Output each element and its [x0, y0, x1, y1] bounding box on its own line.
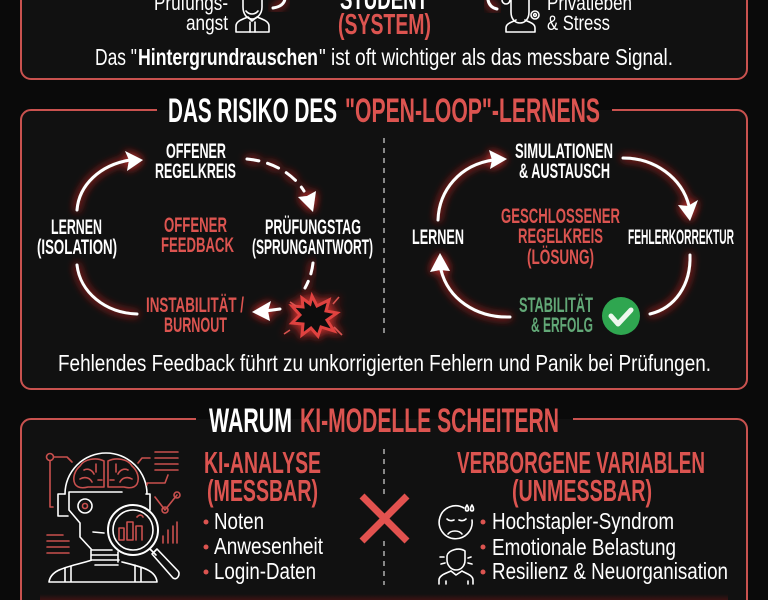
- arrow: stability back to learning: [430, 253, 510, 317]
- label: offener Feedback: OFFENER: [164, 214, 227, 237]
- label: geschlossener Regelkreis: GESCHLOSSENER: [501, 205, 620, 228]
- arrow: explosion to instability: [252, 301, 280, 321]
- label: Instabilität / Burnout: [146, 294, 244, 337]
- panel: why AI models fail: [21, 402, 747, 600]
- heading: KI-Analyse: (MESSBAR): [207, 473, 318, 508]
- arrow: learning to open loop: [77, 151, 143, 210]
- label: Prüfungstag: PRÜFUNGSTAG: [265, 216, 361, 239]
- list: hidden variables: Hochstapler-Syndrom: [492, 508, 674, 534]
- label: Prüfungstag: [252, 216, 373, 259]
- arrow: learning to simulations: [438, 150, 507, 220]
- label: Prüfungsangst: angst: [186, 12, 228, 35]
- label: Instabilität / Burnout: INSTABILITÄT /: [146, 294, 244, 317]
- heading: open-loop risk: DAS RISIKO DES: [168, 92, 337, 130]
- caption: background noise: [95, 44, 673, 70]
- caption: background noise: Hintergrundrauschen: [138, 44, 318, 70]
- icon: green check: [602, 297, 640, 335]
- arrow: dashed exam day to explosion: [305, 263, 313, 288]
- arrow: simulations to correction: [623, 158, 698, 221]
- label: offener Feedback: [161, 214, 234, 257]
- heading: why AI models fail: KI-MODELLE SCHEITERN: [300, 402, 559, 440]
- label: Lernen: LERNEN: [412, 226, 464, 249]
- label: Simulationen und Austausch: & AUSTAUSCH: [519, 160, 610, 183]
- label: Lernen (Isolation): (ISOLATION): [37, 236, 117, 259]
- arrow: private life swirl: [488, 0, 497, 9]
- list: hidden variables: Emotionale Belastung: [492, 534, 676, 560]
- label: geschlossener Regelkreis: (LÖSUNG): [527, 246, 594, 269]
- label: offener Regelkreis: REGELKREIS: [155, 160, 236, 183]
- label: Stabilität und Erfolg: STABILITÄT: [519, 294, 593, 317]
- arrow: exam anxiety swirl: [273, 0, 285, 8]
- label: offener Feedback: FEEDBACK: [161, 234, 234, 257]
- icon: robot head with magnifier: [46, 452, 180, 582]
- heading: hidden variables: (UNMESSBAR): [512, 473, 652, 508]
- label: Simulationen und Austausch: SIMULATIONEN: [515, 140, 613, 163]
- panel: open-loop risk: [21, 92, 747, 389]
- icon: explosion: [284, 296, 342, 336]
- heading: open-loop risk: "OPEN-LOOP"-LERNENS: [345, 92, 600, 130]
- heading: why AI models fail: [209, 402, 559, 440]
- label: Stabilität und Erfolg: [519, 294, 593, 337]
- icon: red cross: [362, 496, 407, 541]
- label: geschlossener Regelkreis: [501, 205, 620, 269]
- arrow: burnout back to learning: [77, 265, 137, 314]
- label: Stabilität und Erfolg: & ERFOLG: [531, 314, 593, 337]
- label: Simulationen und Austausch: [515, 140, 613, 183]
- heading: open-loop risk: [168, 92, 600, 130]
- label: Lernen (Isolation): LERNEN: [51, 216, 102, 239]
- label: geschlossener Regelkreis: REGELKREIS: [518, 225, 603, 248]
- label: Prüfungsangst: [154, 0, 228, 35]
- arrow: correction to stability: [650, 255, 690, 314]
- label: Instabilität / Burnout: BURNOUT: [164, 314, 227, 337]
- label: offener Regelkreis: OFFENER: [166, 140, 226, 163]
- label: offener Regelkreis: [155, 140, 236, 183]
- list: measurable data: [204, 508, 324, 584]
- list: measurable data: Noten: [214, 508, 264, 534]
- label: Privatleben und Stress: & Stress: [547, 12, 610, 35]
- heading: student system: [338, 0, 431, 41]
- list: measurable data: Anwesenheit: [214, 533, 324, 559]
- list: measurable data: Login-Daten: [214, 558, 316, 584]
- heading: KI-Analyse: KI-ANALYSE: [204, 445, 321, 480]
- panel: student system: [21, 0, 747, 79]
- heading: hidden variables: [457, 445, 705, 508]
- icon: student with stethoscope: [236, 0, 269, 32]
- caption: background noise: " ist oft wichtiger als das messbare Signal.: [319, 44, 673, 70]
- icon: worried face: [439, 505, 474, 539]
- arrow: dashed to exam day: [247, 159, 316, 212]
- label: Lernen (Isolation): [37, 216, 117, 259]
- label: Privatleben und Stress: [547, 0, 632, 35]
- icon: stressed person: [439, 549, 473, 584]
- label: Prüfungstag: (SPRUNGANTWORT): [252, 236, 373, 259]
- heading: why AI models fail: WARUM: [209, 402, 292, 440]
- icon: person with stress: [502, 0, 539, 32]
- heading: student system: (SYSTEM): [338, 9, 431, 41]
- heading: KI-Analyse: [204, 445, 321, 508]
- caption: background noise: Das ": [95, 44, 137, 70]
- list: hidden variables: [480, 508, 728, 584]
